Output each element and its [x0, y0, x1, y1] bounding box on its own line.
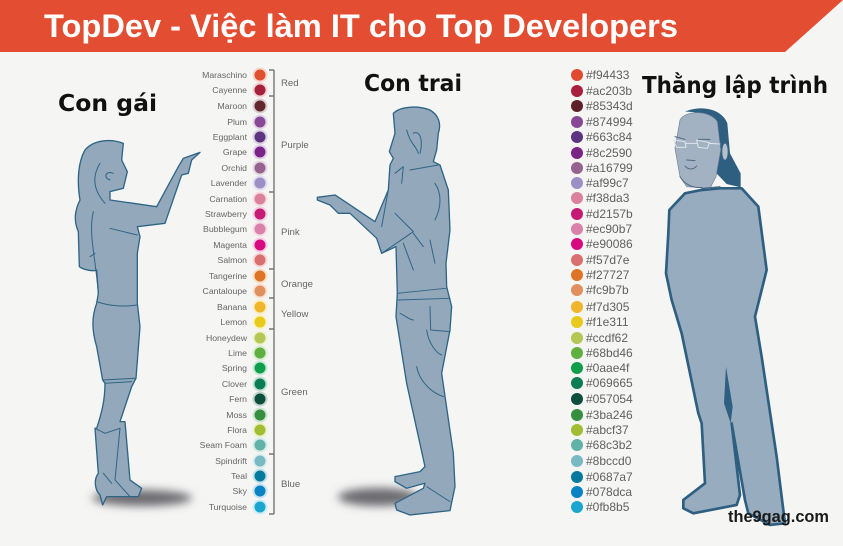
hex code list with swatches: #d2157b [586, 207, 633, 221]
colour names list with swatches: Grape [223, 147, 247, 157]
hex code list with swatches: #0687a7 [586, 470, 633, 484]
colour group labels: Orange [281, 279, 313, 290]
colour group labels: Blue [281, 479, 300, 490]
hex code list with swatches: #ec90b7 [586, 222, 632, 236]
colour names list with swatches: Orchid [221, 163, 247, 173]
colour names list with swatches: Spindrift [215, 456, 248, 466]
colour names list with swatches: Turquoise [209, 502, 247, 512]
colour names list with swatches: Lemon [220, 317, 247, 327]
hex code list with swatches: #078dca [586, 485, 632, 499]
hex code list with swatches: #68bd46 [586, 346, 633, 360]
colour names list with swatches: Flora [227, 425, 247, 435]
hex code list with swatches: #ac203b [586, 84, 632, 98]
colour names list with swatches: Carnation [209, 194, 247, 204]
colour names list with swatches: Lime [228, 348, 247, 358]
colour names list with swatches: Honeydew [206, 333, 248, 343]
hex code list with swatches: #f1e311 [586, 315, 629, 329]
hex code list with swatches: #874994 [586, 115, 633, 129]
colour group labels: Purple [281, 140, 309, 151]
hex code list with swatches [571, 68, 633, 514]
colour names list with swatches: Eggplant [213, 132, 248, 142]
colour names list with swatches: Lavender [211, 178, 247, 188]
colour names list with swatches: Maroon [218, 101, 247, 111]
hex code list with swatches: #68c3b2 [586, 438, 632, 452]
colour names list with swatches: Moss [226, 410, 248, 420]
hex code list with swatches: #057054 [586, 392, 633, 406]
hex code list with swatches: #85343d [586, 99, 633, 113]
hex code list with swatches: #e90086 [586, 237, 633, 251]
colour names list with swatches: Plum [227, 117, 247, 127]
hex code list with swatches: #f7d305 [586, 300, 630, 314]
hex code list with swatches: #a16799 [586, 161, 633, 175]
colour names list with swatches: Magenta [213, 240, 247, 250]
colour names list with swatches: Bubblegum [203, 224, 247, 234]
hex code list with swatches: #af99c7 [586, 176, 629, 190]
heading: Thằng lập trình: Thằng lập trình [642, 72, 828, 99]
colour names list with swatches: Teal [231, 471, 247, 481]
colour names list with swatches: Fern [229, 394, 247, 404]
colour group labels: Green [281, 387, 308, 398]
colour names list with swatches: Seam Foam [200, 440, 247, 450]
hex code list with swatches: #f38da3 [586, 191, 630, 205]
hex code list with swatches: #fc9b7b [586, 283, 629, 297]
colour names list with swatches: Salmon [218, 255, 247, 265]
hex code list with swatches: #abcf37 [586, 423, 629, 437]
colour group labels: Red [281, 78, 299, 89]
colour names list with swatches: Cantaloupe [203, 286, 247, 296]
hex code list with swatches: #069665 [586, 376, 633, 390]
hex code list with swatches: #f57d7e [586, 253, 630, 267]
title banner: TopDev - Việc làm IT cho Top Developers [44, 8, 678, 44]
colour names list with swatches [200, 68, 266, 514]
hex code list with swatches: #3ba246 [586, 408, 633, 422]
figure: woman pointing [75, 141, 200, 506]
colour group labels: Pink [281, 227, 300, 238]
hex code list with swatches: #ccdf62 [586, 331, 628, 345]
colour group bracket [269, 70, 274, 514]
colour names list with swatches: Banana [217, 302, 247, 312]
colour group labels [281, 78, 313, 490]
colour names list with swatches: Spring [222, 363, 247, 373]
colour names list with swatches: Sky [233, 486, 248, 496]
hex code list with swatches: #0fb8b5 [586, 500, 630, 514]
hex code list with swatches: #8c2590 [586, 146, 632, 160]
figure: programmer with glasses [666, 108, 785, 525]
hex code list with swatches: #f94433 [586, 68, 630, 82]
hex code list with swatches: #0aae4f [586, 361, 630, 375]
hex code list with swatches: #8bccd0 [586, 454, 632, 468]
hex code list with swatches: #663c84 [586, 130, 632, 144]
watermark: the9gag.com: the9gag.com [728, 507, 829, 526]
title banner [0, 0, 843, 52]
colour names list with swatches: Tangerine [209, 271, 247, 281]
colour names list with swatches: Strawberry [205, 209, 248, 219]
colour names list with swatches: Cayenne [212, 85, 247, 95]
colour names list with swatches: Maraschino [202, 70, 247, 80]
heading: Con gái: Con gái [58, 91, 157, 117]
colour group labels: Yellow [281, 309, 308, 320]
figure: man pointing [317, 107, 455, 515]
hex code list with swatches: #f27727 [586, 268, 630, 282]
heading: Con trai: Con trai [364, 71, 462, 97]
colour names list with swatches: Clover [222, 379, 247, 389]
